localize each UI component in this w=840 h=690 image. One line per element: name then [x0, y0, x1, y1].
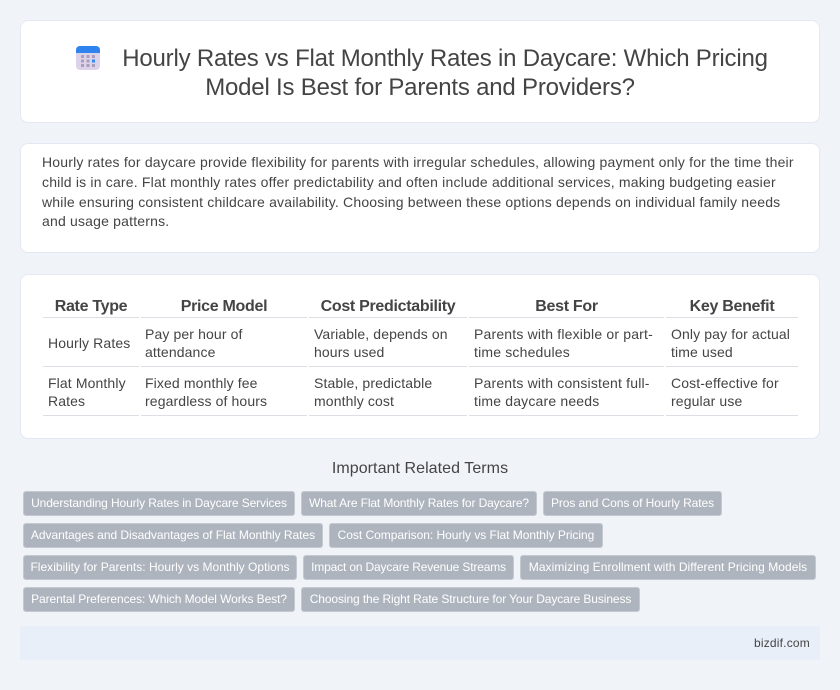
description text: and usage patterns.: [42, 213, 169, 229]
description text: [42, 154, 794, 229]
tag: Advantages and Disadvantages of Flat Monthly Rates: [31, 528, 315, 542]
tag: Cost Comparison: Hourly vs Flat Monthly Pricing: [338, 528, 594, 542]
tag: What Are Flat Monthly Rates for Daycare?: [309, 496, 529, 510]
title: Hourly Rates vs Flat Monthly Rates in Daycare: Which Pricing: [122, 45, 768, 72]
tag: [23, 555, 297, 580]
tag: Choosing the Right Rate Structure for Your Daycare Business: [310, 592, 631, 606]
row: flat monthly rates: monthly cost: [314, 393, 394, 409]
tag: [23, 491, 295, 516]
row: flat monthly rates: Rates: [48, 393, 85, 409]
panel: description: [20, 143, 820, 253]
row: hourly rates: Hourly Rates: [48, 335, 130, 351]
tag: Impact on Daycare Revenue Streams: [311, 560, 506, 574]
tag: [301, 587, 640, 612]
title: Model Is Best for Parents and Providers?: [205, 74, 635, 101]
description text: Hourly rates for daycare provide flexibility for parents with irregular schedules, allowing payment only for the time their: [42, 154, 794, 170]
tag: [301, 491, 537, 516]
description text: child is in care. Flat monthly rates offer predictability and often include additional services, making budgeting easier: [42, 174, 776, 190]
row: hourly rates: Pay per hour of: [145, 326, 243, 342]
header: Price Model: Price Model: [181, 298, 267, 315]
row: hourly rates: Parents with flexible or part-: [474, 326, 653, 342]
row: flat monthly rates: Parents with consistent full-: [474, 375, 650, 391]
heading: related terms: Important Related Terms: [332, 460, 508, 477]
row: flat monthly rates: Cost-effective for: [671, 375, 779, 391]
row: hourly rates: Only pay for actual: [671, 326, 790, 342]
panel: comparison table: [20, 274, 820, 439]
tag: [329, 523, 603, 548]
row: flat monthly rates: Flat Monthly: [48, 375, 126, 391]
row: hourly rates: time used: [671, 344, 733, 360]
header: Cost Predictability: Cost Predictability: [321, 298, 455, 315]
tag: [303, 555, 514, 580]
row: hourly rates: attendance: [145, 344, 215, 360]
tag: [543, 491, 722, 516]
header: Rate Type: Rate Type: [55, 298, 127, 315]
row: flat monthly rates: [48, 375, 779, 409]
title: [122, 45, 768, 101]
tag: Understanding Hourly Rates in Daycare Services: [31, 496, 287, 510]
icon: calendar: [76, 46, 100, 70]
row: flat monthly rates: time daycare needs: [474, 393, 599, 409]
row: hourly rates: hours used: [314, 344, 384, 360]
row: flat monthly rates: Fixed monthly fee: [145, 375, 258, 391]
header: Best For: Best For: [535, 298, 598, 315]
row: hourly rates: time schedules: [474, 344, 570, 360]
tag: Flexibility for Parents: Hourly vs Monthly Options: [30, 560, 290, 574]
tag: [23, 523, 323, 548]
tag: Maximizing Enrollment with Different Pricing Models: [529, 560, 807, 574]
tag: [520, 555, 816, 580]
table: rate comparison: [43, 298, 798, 416]
row: hourly rates: Variable, depends on: [314, 326, 448, 342]
footer bar: [20, 626, 820, 660]
row: flat monthly rates: regular use: [671, 393, 742, 409]
tag: Pros and Cons of Hourly Rates: [551, 496, 714, 510]
tag: [23, 587, 295, 612]
row: hourly rates: [48, 326, 790, 360]
tag: Parental Preferences: Which Model Works Best?: [31, 592, 287, 606]
header: Key Benefit: Key Benefit: [690, 298, 774, 315]
description text: while ensuring consistent childcare availability. Choosing between these options depends on individual family needs: [42, 194, 780, 210]
panel: title card: [20, 20, 820, 123]
row: flat monthly rates: regardless of hours: [145, 393, 267, 409]
row: flat monthly rates: Stable, predictable: [314, 375, 432, 391]
related term tags: [23, 491, 816, 612]
footer text: bizdif.com: [754, 636, 810, 650]
